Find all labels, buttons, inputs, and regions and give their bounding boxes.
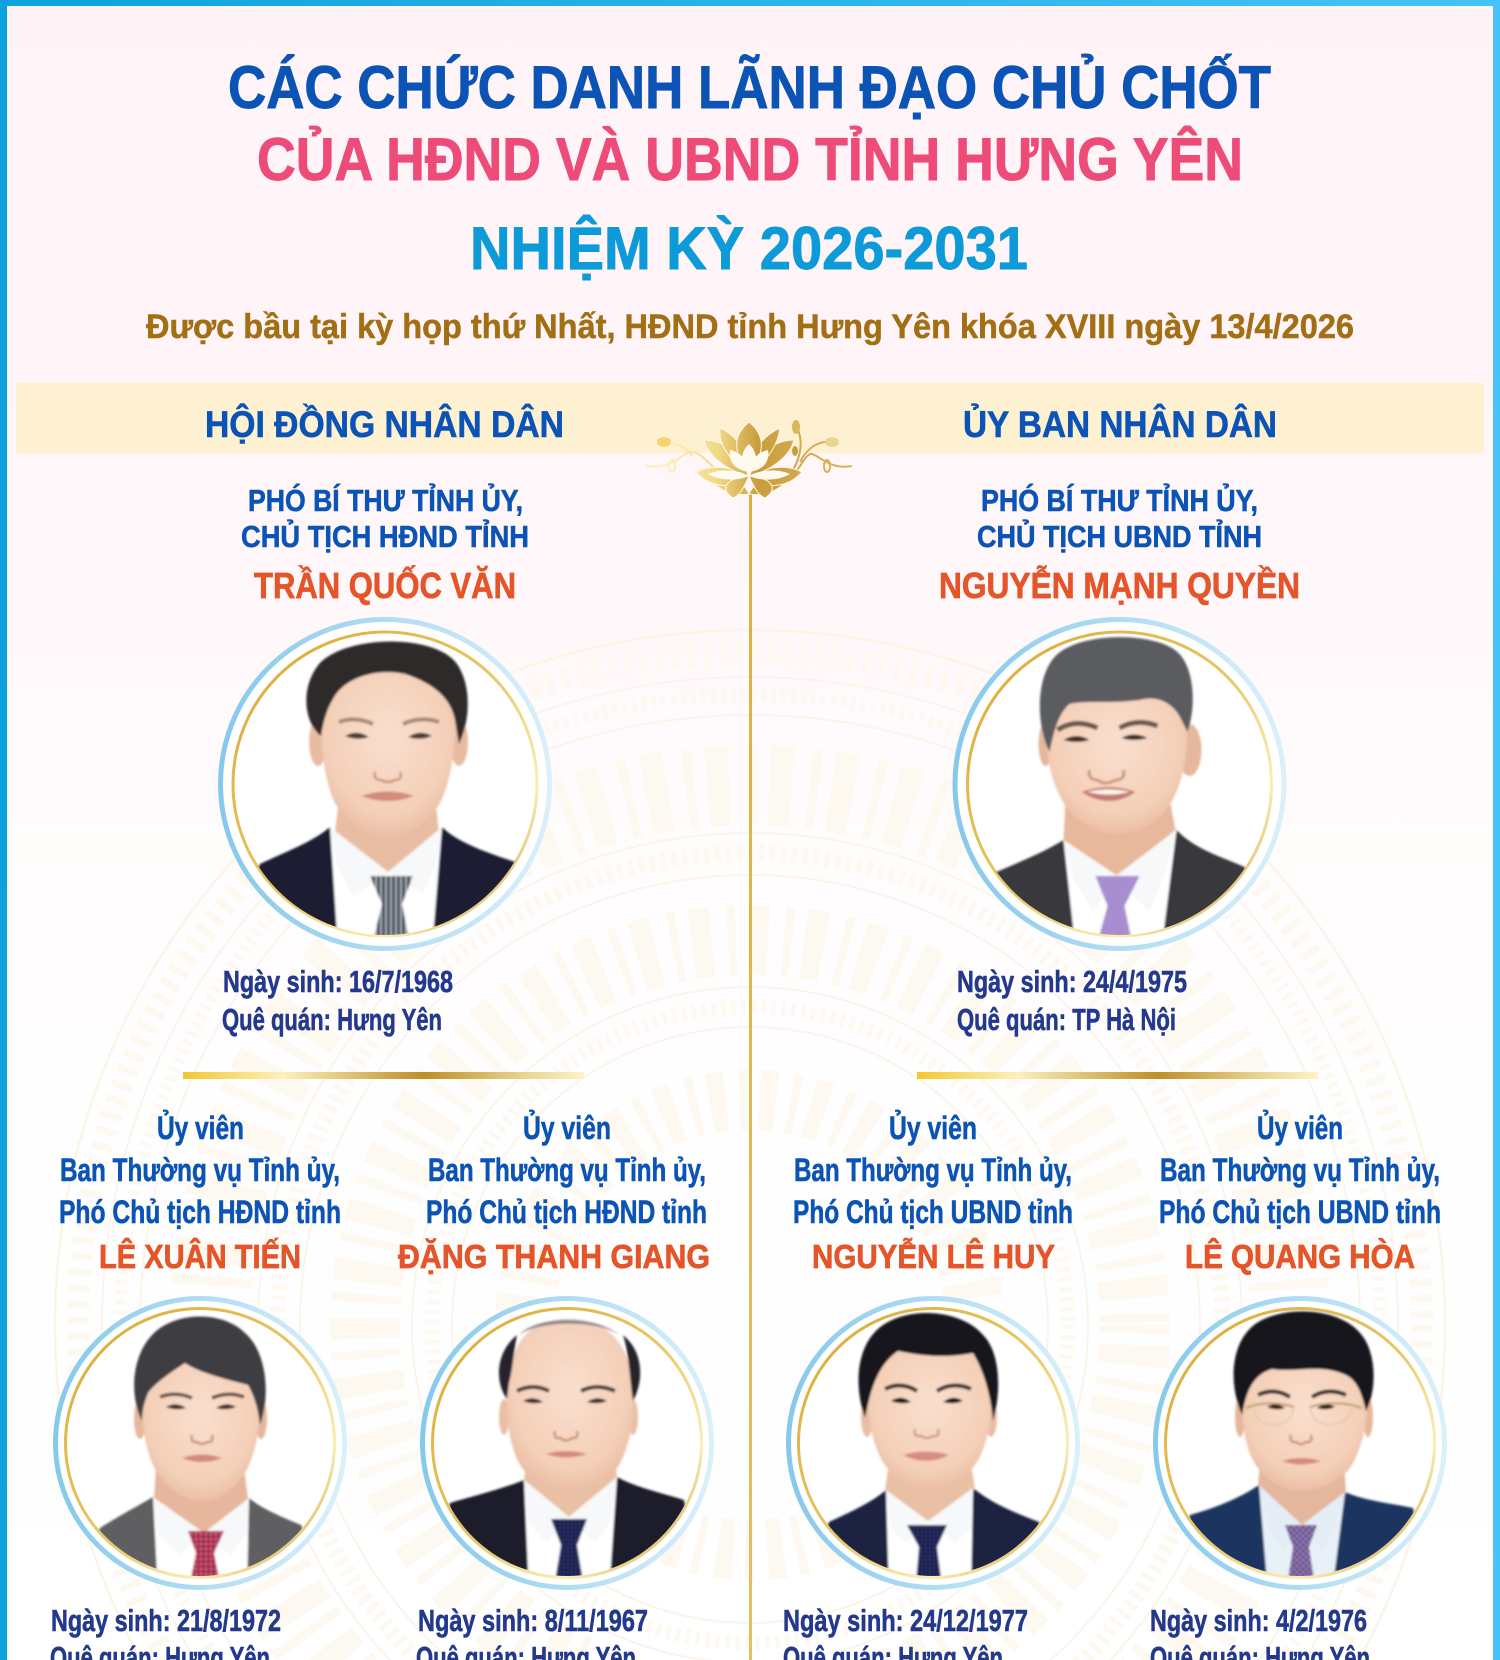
- panel: Đặng Thanh Giang: [398, 1110, 712, 1660]
- role: Lê Quang Hòa: Ủy viên: [1257, 1110, 1343, 1146]
- portrait: Đặng Thanh Giang: [422, 1298, 712, 1593]
- panel: Trần Quốc Văn: [220, 482, 550, 1037]
- role: Lê Xuân Tiến: Ủy viên: [157, 1110, 244, 1146]
- info: Nguyễn Lê Huy: Ngày sinh: 24/12/1977: [783, 1603, 1028, 1638]
- info: Lê Xuân Tiến: [50, 1603, 281, 1660]
- role: Đặng Thanh Giang: Ban Thường vụ Tỉnh ủy,: [428, 1152, 706, 1188]
- icon: gold lotus: [646, 420, 852, 498]
- role: Lê Xuân Tiến: Ban Thường vụ Tỉnh ủy,: [60, 1152, 340, 1188]
- info: Trần Quốc Văn: [222, 964, 453, 1037]
- divider left: [183, 1072, 584, 1079]
- title: [228, 54, 1271, 282]
- panel: Nguyễn Mạnh Quyền: [939, 482, 1300, 1037]
- name: Lê Quang Hòa: LÊ QUANG HÒA: [1185, 1238, 1415, 1275]
- panel: Lê Xuân Tiến: [50, 1110, 344, 1660]
- panel: Nguyễn Lê Huy: [783, 1110, 1078, 1660]
- role: Nguyễn Lê Huy: Phó Chủ tịch UBND tỉnh: [793, 1194, 1073, 1230]
- role: Lê Xuân Tiến: [59, 1110, 341, 1230]
- portrait: Lê Quang Hòa: [1156, 1298, 1444, 1593]
- drum watermark: [55, 630, 1445, 1660]
- heading: Hội đồng nhân dân: HỘI ĐỒNG NHÂN DÂN: [205, 403, 564, 445]
- title: NHIỆM KỲ 2026-2031: [470, 215, 1028, 282]
- name: Đặng Thanh Giang: ĐẶNG THANH GIANG: [398, 1238, 710, 1275]
- role: Phó Bí thư, Chủ tịch HĐND: CHỦ TỊCH HĐND TỈNH: [241, 518, 529, 554]
- name: Trần Quốc Văn: TRẦN QUỐC VĂN: [254, 564, 516, 606]
- center gold line: [749, 492, 752, 1660]
- info: Lê Quang Hòa: Ngày sinh: 4/2/1976: [1150, 1603, 1367, 1638]
- info: Nguyễn Mạnh Quyền: Quê quán: TP Hà Nội: [957, 1002, 1176, 1037]
- role: Đặng Thanh Giang: Phó Chủ tịch HĐND tỉnh: [426, 1194, 707, 1230]
- info: Nguyễn Lê Huy: [783, 1603, 1028, 1660]
- info: Trần Quốc Văn: Quê quán: Hưng Yên: [222, 1002, 442, 1037]
- section band: [16, 383, 1484, 453]
- divider right: [917, 1072, 1318, 1079]
- role: Phó Bí thư, Chủ tịch UBND: CHỦ TỊCH UBND TỈNH: [977, 518, 1262, 554]
- role: Đặng Thanh Giang: Ủy viên: [523, 1110, 611, 1146]
- subtitle: Được bầu tại kỳ họp thứ Nhất, HĐND tỉnh Hưng Yên khóa XVIII ngày 13/4/2026: [146, 308, 1354, 346]
- info: Lê Quang Hòa: [1150, 1603, 1370, 1660]
- name: Nguyễn Mạnh Quyền: NGUYỄN MẠNH QUYỀN: [939, 564, 1300, 606]
- info: Đặng Thanh Giang: Ngày sinh: 8/11/1967: [418, 1603, 648, 1638]
- title: CÁC CHỨC DANH LÃNH ĐẠO CHỦ CHỐT: [228, 54, 1271, 121]
- role: Lê Quang Hòa: [1159, 1110, 1441, 1230]
- name: Nguyễn Lê Huy: NGUYỄN LÊ HUY: [812, 1238, 1055, 1275]
- panel: Lê Quang Hòa: [1150, 1110, 1444, 1660]
- role: Nguyễn Lê Huy: Ủy viên: [889, 1110, 977, 1146]
- portrait: Trần Quốc Văn: [220, 620, 550, 954]
- heading: Ủy ban nhân dân: ỦY BAN NHÂN DÂN: [963, 403, 1277, 445]
- role: Phó Bí thư, Chủ tịch UBND: PHÓ BÍ THƯ TỈNH ỦY,: [981, 482, 1258, 518]
- role: Phó Bí thư, Chủ tịch HĐND: PHÓ BÍ THƯ TỈNH ỦY,: [248, 482, 523, 518]
- role: Phó Bí thư, Chủ tịch HĐND: [241, 482, 529, 554]
- role: Lê Xuân Tiến: Phó Chủ tịch HĐND tỉnh: [59, 1194, 341, 1230]
- info: Trần Quốc Văn: Ngày sinh: 16/7/1968: [223, 964, 453, 999]
- info: Đặng Thanh Giang: [416, 1603, 648, 1660]
- role: Đặng Thanh Giang: [426, 1110, 707, 1230]
- portrait: Lê Xuân Tiến: [56, 1298, 344, 1593]
- name: Lê Xuân Tiến: LÊ XUÂN TIẾN: [99, 1238, 301, 1275]
- title: CỦA HĐND VÀ UBND TỈNH HƯNG YÊN: [257, 126, 1243, 193]
- info: Lê Xuân Tiến: Ngày sinh: 21/8/1972: [51, 1603, 281, 1638]
- info: Nguyễn Mạnh Quyền: [957, 964, 1187, 1037]
- role: Nguyễn Lê Huy: [793, 1110, 1073, 1230]
- role: Phó Bí thư, Chủ tịch UBND: [977, 482, 1262, 554]
- info: Nguyễn Mạnh Quyền: Ngày sinh: 24/4/1975: [957, 964, 1187, 999]
- portrait: Nguyễn Mạnh Quyền: [955, 620, 1284, 954]
- portrait: Nguyễn Lê Huy: [788, 1298, 1078, 1593]
- role: Nguyễn Lê Huy: Ban Thường vụ Tỉnh ủy,: [794, 1152, 1072, 1188]
